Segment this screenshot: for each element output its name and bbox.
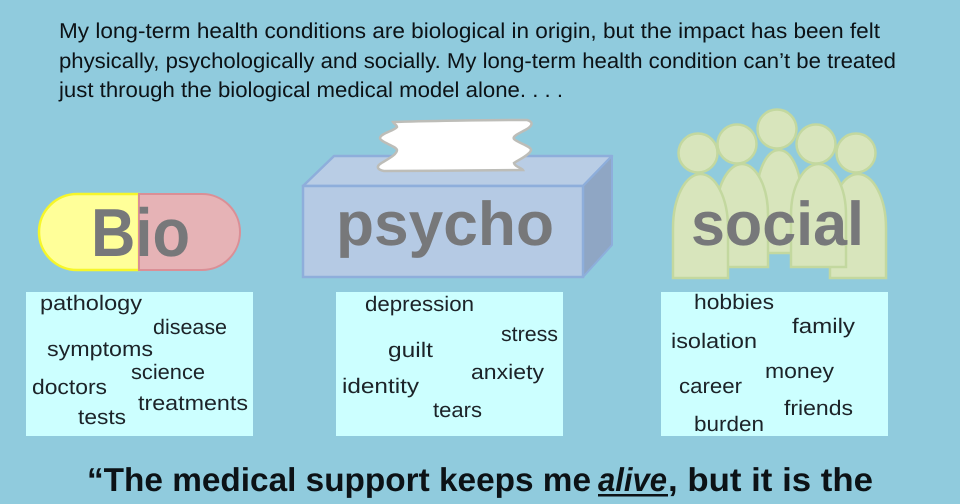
intro text: My long-term health conditions are biological in origin, but the impact has been felt	[59, 19, 880, 43]
panel: psycho words	[336, 292, 563, 436]
panel: psycho words: depression	[365, 293, 474, 316]
quote: , but it is the	[668, 461, 873, 498]
panel: psycho words: tears	[433, 399, 482, 422]
quote: “The medical support keeps me	[87, 461, 591, 498]
panel: social words: family	[792, 315, 856, 338]
panel: social words: friends	[784, 397, 853, 420]
panel: social words: isolation	[671, 330, 757, 353]
heading: psycho: psycho	[336, 190, 554, 259]
panel: bio words: disease	[153, 316, 227, 339]
intro text	[58, 19, 896, 102]
panel: bio words: science	[131, 361, 205, 384]
panel: social words: hobbies	[694, 291, 774, 314]
panel: bio words: pathology	[40, 292, 143, 315]
heading: Bio: Bio	[91, 195, 190, 271]
panel: psycho words: identity	[342, 375, 420, 398]
panel: bio words: symptoms	[47, 338, 153, 361]
heading: social: social	[691, 190, 864, 259]
panel: bio words: treatments	[138, 392, 248, 415]
panel: bio words: tests	[78, 406, 126, 429]
panel: social words	[661, 291, 888, 436]
panel: psycho words: anxiety	[471, 361, 545, 384]
panel: bio words	[26, 292, 253, 436]
quote: alive	[598, 461, 667, 498]
panel: psycho words: guilt	[388, 339, 433, 362]
panel: social words: money	[765, 360, 835, 383]
intro text: physically, psychologically and socially. My long-term health condition can’t be treated	[59, 49, 896, 73]
icon: tissue	[378, 120, 532, 171]
panel: social words: burden	[694, 413, 764, 436]
panel: bio words: doctors	[32, 376, 107, 399]
panel: social words: career	[679, 375, 742, 398]
panel: psycho tissue box	[303, 120, 612, 277]
panel: social people group	[673, 110, 886, 278]
intro text: just through the biological medical model alone. . . .	[58, 78, 563, 102]
quote	[87, 461, 873, 498]
panel: psycho words: stress	[501, 323, 558, 346]
panel: bio pill	[39, 194, 240, 271]
